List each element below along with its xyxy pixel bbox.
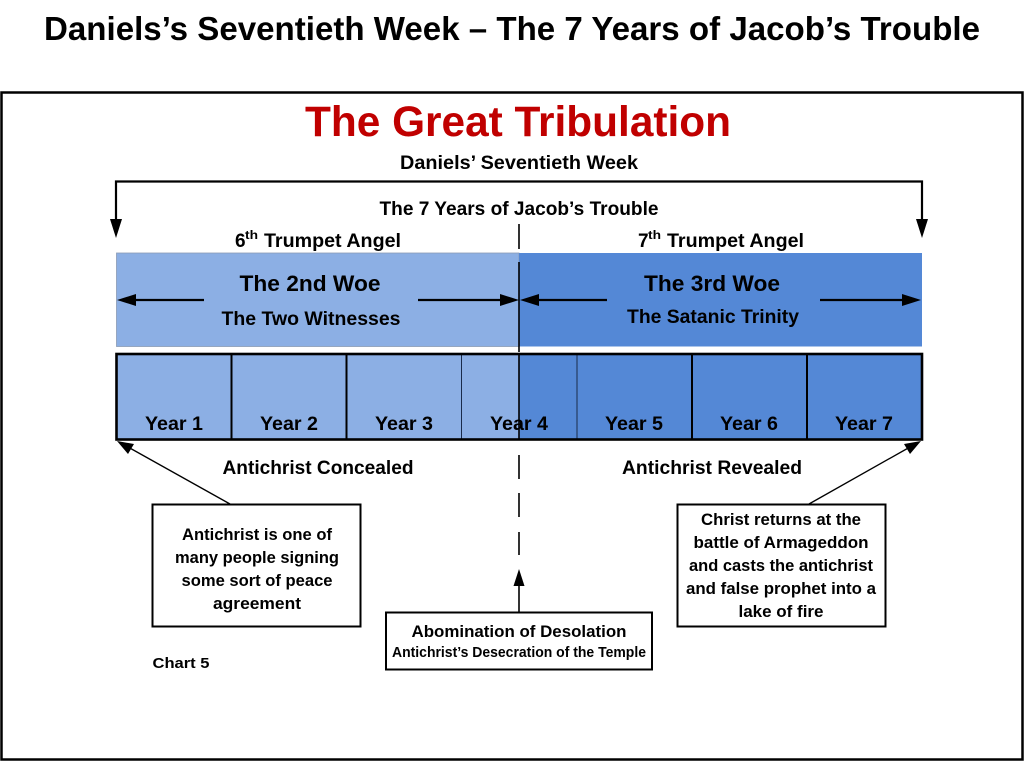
- callout: christ returns: lake of fire: [738, 603, 824, 621]
- callout: christ returns: and false prophet into a: [686, 580, 877, 598]
- panel: seven year timeline: [116, 354, 922, 440]
- year labels: Year 4: [490, 414, 548, 435]
- arrow: right callout to year 7: [809, 441, 921, 504]
- label: 6th Trumpet Angel: 6: [235, 231, 246, 252]
- chart number: Chart 5: [152, 656, 210, 672]
- label: Antichrist Concealed: Antichrist Concealed: [222, 458, 414, 479]
- label: 7th Trumpet Angel: 7: [638, 231, 649, 252]
- callout: antichrist signing: agreement: [213, 595, 302, 613]
- callout: christ returns: battle of Armageddon: [694, 534, 868, 552]
- callout: antichrist signing: some sort of peace: [182, 572, 332, 590]
- year labels: Year 2: [260, 414, 318, 435]
- callout: antichrist signing: many people signing: [175, 549, 339, 567]
- callout: abomination of desolation: Antichrist’s Desecration of the Temple: [392, 645, 646, 661]
- heading: The 2nd Woe: The 2nd Woe: [240, 271, 380, 296]
- label: 7th Trumpet Angel: [638, 228, 804, 252]
- heading: The 3rd Woe: The 3rd Woe: [644, 271, 780, 296]
- label: 6th Trumpet Angel: Trumpet Angel: [264, 231, 401, 252]
- heading: The Great Tribulation: The Great Tribulation: [305, 98, 731, 146]
- callout: antichrist signing: Antichrist is one of: [182, 526, 332, 544]
- dashed midpoint line: [518, 224, 520, 555]
- callout: antichrist signing: [152, 504, 360, 626]
- label: 6th Trumpet Angel: th: [245, 228, 258, 242]
- text: The Two Witnesses: The Two Witnesses: [222, 309, 400, 330]
- year labels: [145, 414, 893, 435]
- page title: Daniels’s Seventieth Week – The 7 Years of Jacob’s Trouble: [44, 10, 980, 47]
- text: The Satanic Trinity: The Satanic Trinity: [627, 307, 799, 328]
- arrow: abomination up to midpoint: [514, 569, 524, 612]
- panel: the 3rd woe band: [519, 253, 922, 346]
- year labels: Year 6: [720, 414, 778, 435]
- label: 6th Trumpet Angel: [235, 228, 401, 252]
- callout: christ returns: and casts the antichrist: [689, 557, 873, 575]
- callout: abomination of desolation: Abomination of Desolation: [412, 622, 626, 641]
- year labels: Year 7: [835, 414, 893, 435]
- callout: christ returns: [678, 504, 886, 626]
- year labels: Year 3: [375, 414, 433, 435]
- panel: the 2nd woe band: [116, 253, 519, 346]
- arrow: left callout to year 1: [117, 441, 230, 504]
- callout: christ returns: Christ returns at the: [701, 511, 861, 529]
- arrows: 2nd woe span: [117, 294, 519, 306]
- year labels: Year 1: [145, 414, 203, 435]
- year labels: Year 5: [605, 414, 663, 435]
- bracket arrow spanning the seven years: [110, 182, 928, 238]
- arrows: 3rd woe span: [520, 294, 921, 306]
- callout: abomination of desolation: [386, 612, 652, 670]
- label: Antichrist Revealed: Antichrist Revealed: [622, 458, 802, 479]
- subheading: Daniels' Seventieth Week: Daniels’ Seventieth Week: [400, 153, 638, 174]
- label: 7th Trumpet Angel: th: [648, 228, 661, 242]
- label: The 7 Years of Jacob's Trouble: The 7 Years of Jacob’s Trouble: [380, 199, 658, 220]
- label: 7th Trumpet Angel: Trumpet Angel: [667, 231, 804, 252]
